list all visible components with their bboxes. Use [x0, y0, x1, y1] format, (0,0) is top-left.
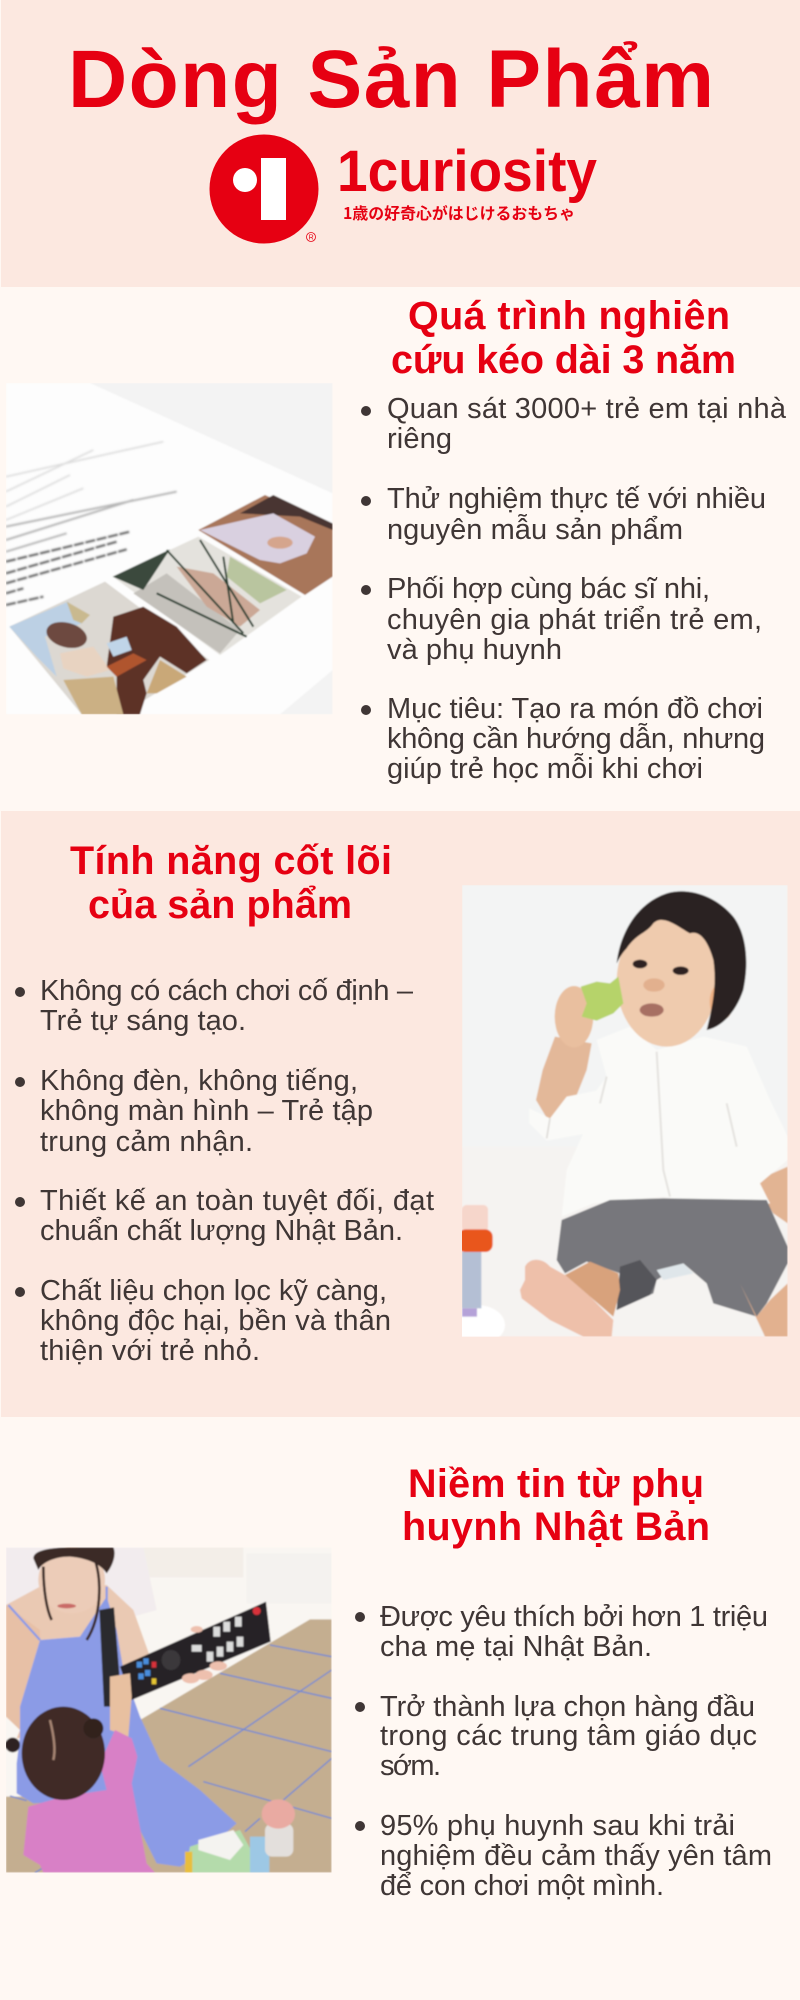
bullet item 1: riêng [387, 423, 452, 455]
photo inset: child under cloth [198, 495, 333, 595]
green toy [581, 977, 623, 1021]
bullet item 2: Trở thành lựa chọn hàng đầu [380, 1691, 755, 1723]
arm and hand [536, 986, 593, 1123]
bullet item 1: Không có cách chơi cố định – [40, 975, 414, 1007]
logo: 1curiosity [210, 134, 597, 244]
shorts [557, 1198, 788, 1317]
baby right arm [760, 1166, 788, 1224]
bullet item 2: sớm. [380, 1750, 441, 1782]
bullet item 4: giúp trẻ học mỗi khi chơi [387, 752, 703, 785]
bullet item 2: nguyên mẫu sản phẩm [387, 513, 683, 546]
panel: core features [1, 811, 800, 1417]
bullet item 3: và phụ huynh [387, 634, 562, 666]
header panel [1, 0, 800, 287]
bullet item 3: để con chơi một mình. [380, 1870, 664, 1902]
bullet item 3: Thiết kế an toàn tuyệt đối, đạt [40, 1185, 434, 1217]
photo: research document [6, 383, 333, 714]
bullet item 4: không cần hướng dẫn, nhưng [387, 722, 765, 755]
heading: features: của sản phẩm [88, 883, 352, 927]
bullet item 4 [361, 693, 765, 785]
bullet item 4: Chất liệu chọn lọc kỹ càng, [40, 1275, 387, 1307]
bullet item 1 [355, 1601, 768, 1663]
face and hair [617, 891, 746, 1047]
bullet item 3 [361, 573, 762, 666]
logo: 1curiosity: R [309, 234, 314, 242]
photo: baby with green toy [448, 885, 788, 1345]
bullet item 2 [361, 483, 766, 546]
bullet item 2: Không đèn, không tiếng, [40, 1065, 358, 1097]
heading: trust: huynh Nhật Bản [402, 1505, 710, 1549]
toys and bottle [185, 1799, 295, 1873]
bullet item 3: nghiệm đều cảm thấy yên tâm [380, 1840, 772, 1872]
child [5, 1673, 155, 1873]
title: Dòng Sản Phẩm [68, 34, 714, 125]
bullet item 2 [15, 1065, 373, 1158]
panel: research process [6, 294, 787, 785]
logo: 1curiosity: 1curiosity [337, 139, 597, 204]
bullet item 3: chuyên gia phát triển trẻ em, [387, 604, 762, 636]
bullet item 4: không độc hại, bền và thân [40, 1305, 391, 1337]
bullet item 3 [15, 1185, 434, 1247]
heading: research [391, 294, 736, 382]
bullet item 1: cha mẹ tại Nhật Bản. [380, 1631, 652, 1663]
bullet item 3: Phối hợp cùng bác sĩ nhi, [387, 573, 710, 605]
photo inset: plant [113, 537, 302, 655]
heading: trust [402, 1462, 710, 1549]
bullet item 2: Thử nghiệm thực tế với nhiều [387, 483, 766, 515]
bullet item 4: Mục tiêu: Tạo ra món đồ chơi [387, 693, 763, 725]
bullet item 3: 95% phụ huynh sau khi trải [380, 1810, 735, 1842]
leg and foot [520, 1260, 788, 1337]
list: research points [361, 393, 787, 785]
logo: 1curiosity: 1歳の好奇心がはじけるおもちゃ [343, 200, 575, 224]
bullet item 1 [361, 393, 787, 455]
remote controls [99, 1602, 271, 1707]
photo inset: baby at table [9, 582, 209, 714]
heading: trust: Niềm tin từ phụ [408, 1462, 704, 1506]
heading: features: Tính năng cốt lõi [70, 839, 392, 883]
carpet [6, 1619, 332, 1873]
bullet item 1: Quan sát 3000+ trẻ em tại nhà [387, 393, 787, 425]
bullet item 1: Được yêu thích bởi hơn 1 triệu [380, 1601, 768, 1633]
bullet item 4: thiện với trẻ nhỏ. [40, 1335, 260, 1367]
bullet item 3: chuẩn chất lượng Nhật Bản. [40, 1215, 403, 1247]
photo: mother and child with remote [5, 1547, 332, 1873]
list: trust points [355, 1601, 772, 1902]
heading: research: cứu kéo dài 3 năm [391, 338, 736, 382]
bullet item 1 [15, 975, 414, 1037]
bullet item 2: trong các trung tâm giáo dục [380, 1720, 757, 1752]
heading: features [70, 839, 392, 927]
heading: research: Quá trình nghiên [408, 294, 730, 338]
bullet item 3 [355, 1810, 772, 1902]
bullet item 2: không màn hình – Trẻ tập [40, 1095, 373, 1127]
bullet item 1: Trẻ tự sáng tạo. [40, 1005, 246, 1037]
mother [6, 1547, 237, 1867]
shirt [545, 1052, 772, 1204]
bullet item 2 [355, 1691, 757, 1782]
list: feature points [15, 975, 434, 1367]
bullet item 2: trung cảm nhận. [40, 1126, 253, 1158]
toy ring stack [462, 1204, 505, 1336]
panel: trust from parents [5, 1462, 772, 1902]
bullet item 4 [15, 1275, 391, 1367]
